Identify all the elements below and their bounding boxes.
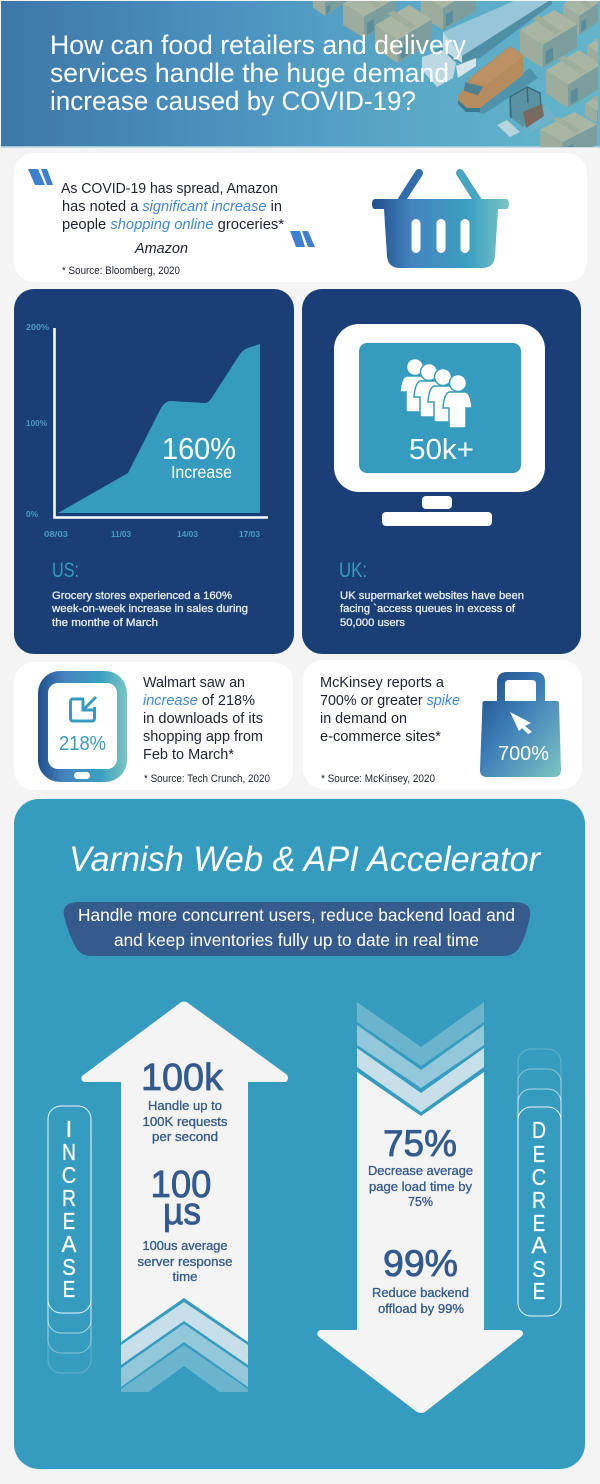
stat: 100 microseconds: 100us average bbox=[142, 1239, 228, 1253]
McKinsey text bbox=[320, 674, 460, 785]
increase label stack: A bbox=[62, 1231, 77, 1257]
area chart: 17/03 bbox=[239, 530, 261, 539]
area chart bbox=[26, 323, 268, 539]
increase label stack: I bbox=[66, 1116, 72, 1142]
stat: 75% bbox=[368, 1123, 473, 1209]
US text: week-on-week increase in sales during bbox=[51, 603, 248, 615]
stat: 75%: 75% bbox=[408, 1195, 433, 1209]
decrease label stack: C bbox=[532, 1164, 546, 1190]
panel: Walmart bbox=[14, 662, 293, 790]
panel: UK bbox=[302, 289, 581, 654]
van bbox=[478, 68, 538, 114]
McKinsey text: * Source: McKinsey, 2020 bbox=[321, 773, 435, 785]
icon: phone bbox=[38, 671, 127, 782]
area chart: 14/03 bbox=[177, 530, 199, 539]
area chart: 08/03 bbox=[44, 530, 69, 539]
area chart: Increase bbox=[171, 462, 232, 482]
area chart: 0% bbox=[26, 510, 38, 519]
quote text: Amazon bbox=[134, 240, 188, 257]
down arrow bbox=[317, 1002, 523, 1413]
quote text: people shopping online groceries* bbox=[62, 216, 284, 233]
heading: UK: UK: bbox=[339, 559, 367, 582]
stat: 100 microseconds: 100 bbox=[150, 1164, 212, 1206]
decrease label stack: S bbox=[532, 1256, 546, 1282]
stat: 100k: per second bbox=[152, 1130, 218, 1144]
icon: queue of people bbox=[400, 358, 472, 428]
Walmart text: Walmart saw an bbox=[143, 674, 245, 691]
Walmart text: * Source: Tech Crunch, 2020 bbox=[144, 773, 270, 785]
stat: 99%: Reduce backend bbox=[372, 1286, 469, 1300]
icon: shopping bag bbox=[480, 672, 561, 777]
area chart: 160% bbox=[162, 431, 236, 466]
title: increase caused by COVID-19? bbox=[50, 86, 416, 116]
icon: shopping basket bbox=[372, 173, 509, 268]
UK text bbox=[340, 590, 524, 629]
heading: US: US: bbox=[52, 559, 79, 582]
increase label stack: C bbox=[62, 1162, 76, 1188]
stat: 100 microseconds: server response bbox=[138, 1255, 233, 1269]
subtitle pill: Handle more concurrent users, reduce backend load and bbox=[78, 905, 515, 925]
McKinsey text: 700% or greater spike bbox=[320, 692, 460, 709]
quote text: As COVID-19 has spread, Amazon bbox=[61, 180, 278, 197]
stat: 75%: 75% bbox=[383, 1123, 457, 1164]
stat: 99% bbox=[372, 1243, 469, 1316]
quote text: * Source: Bloomberg, 2020 bbox=[62, 265, 180, 277]
UK text: 50,000 users bbox=[340, 617, 406, 629]
UK text: UK supermarket websites have been bbox=[340, 590, 524, 602]
forklift bbox=[527, 107, 556, 133]
title: How can food retailers and delivery bbox=[50, 30, 467, 60]
icon: monitor: 50k+ bbox=[409, 434, 474, 466]
stat: 100k: 100k bbox=[141, 1057, 224, 1099]
decrease label stack: E bbox=[533, 1278, 545, 1304]
icon: shopping bag: 700% bbox=[498, 743, 549, 765]
Walmart text: shopping app from bbox=[143, 728, 263, 745]
US text: the monthe of March bbox=[52, 617, 158, 629]
quote text bbox=[61, 180, 284, 277]
title bbox=[50, 30, 467, 116]
decrease label stack: E bbox=[533, 1141, 545, 1167]
McKinsey text: e-commerce sites* bbox=[320, 728, 441, 745]
increase label stack: N bbox=[62, 1139, 76, 1165]
increase label stack: E bbox=[63, 1276, 75, 1302]
decrease label stack: D bbox=[532, 1117, 546, 1143]
decrease label stack: R bbox=[532, 1187, 546, 1213]
stat: 100 microseconds: µs bbox=[163, 1191, 201, 1233]
stat: 100 microseconds bbox=[138, 1164, 233, 1284]
panel: McKinsey bbox=[303, 660, 582, 789]
increase label stack: E bbox=[63, 1208, 75, 1234]
icon: opening quote bbox=[28, 169, 53, 185]
icon: closing quote bbox=[290, 231, 315, 247]
stat: 100k: 100K requests bbox=[142, 1115, 228, 1129]
stat: 99%: offload by 99% bbox=[378, 1302, 464, 1316]
heading: Varnish: Varnish Web & API Accelerator bbox=[69, 840, 541, 879]
stat: 100 microseconds: time bbox=[172, 1270, 198, 1284]
US text: Grocery stores experienced a 160% bbox=[52, 590, 232, 602]
subtitle pill: and keep inventories fully up to date in real time bbox=[114, 930, 479, 950]
area chart: 100% bbox=[26, 419, 47, 428]
Walmart text bbox=[143, 674, 270, 785]
up arrow bbox=[81, 1002, 288, 1392]
increase label stack: S bbox=[62, 1254, 76, 1280]
McKinsey text: in demand on bbox=[320, 710, 407, 727]
decrease label stack: E bbox=[533, 1210, 545, 1236]
US text bbox=[51, 590, 248, 629]
quote text: has noted a significant increase in bbox=[62, 198, 282, 215]
panel: Amazon quote bbox=[14, 153, 587, 282]
panel: US bbox=[14, 289, 294, 654]
illustration: warehouse yard with truck, van and forklift bbox=[313, 1, 598, 147]
Walmart text: in downloads of its bbox=[143, 710, 263, 727]
stat: 100k: Handle up to bbox=[148, 1099, 222, 1113]
stat: 75%: Decrease average bbox=[368, 1164, 473, 1178]
Walmart text: Feb to March* bbox=[143, 746, 234, 763]
decrease label stack bbox=[518, 1049, 561, 1316]
decrease label stack: A bbox=[532, 1232, 547, 1258]
area chart: 200% bbox=[26, 323, 49, 332]
stat: 100k bbox=[141, 1057, 228, 1144]
increase label stack: R bbox=[62, 1185, 76, 1211]
icon: monitor bbox=[334, 324, 545, 526]
stat: 99%: 99% bbox=[383, 1243, 458, 1284]
subtitle pill bbox=[64, 902, 530, 956]
panel: Varnish bbox=[14, 799, 585, 1469]
McKinsey text: McKinsey reports a bbox=[320, 674, 445, 691]
UK text: facing `access queues in excess of bbox=[340, 603, 516, 615]
truck bbox=[433, 0, 552, 64]
stat: 75%: page load time by bbox=[369, 1180, 473, 1194]
increase label stack bbox=[48, 1106, 91, 1373]
icon: phone: 218% bbox=[59, 733, 106, 755]
Walmart text: increase of 218% bbox=[143, 692, 255, 709]
title: services handle the huge demand bbox=[50, 58, 449, 88]
area chart: 11/03 bbox=[111, 530, 132, 539]
header banner bbox=[1, 0, 600, 162]
